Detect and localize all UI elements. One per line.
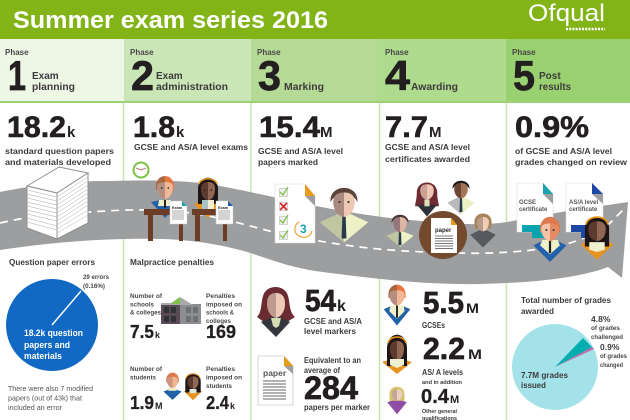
phase 3 [257,48,324,99]
headline stat: phase 3: papers marked [258,157,318,167]
panel: total grades awarded: changed [600,362,623,369]
headline stat: phase 4: GCSE and AS/A level [385,142,470,152]
icon: paper on brown circle: paper [435,228,452,234]
headline stat: phase 5 [515,111,627,167]
certificate: GCSE [517,183,553,238]
panel: malpractice penalties [130,257,242,413]
phase 3: Marking [284,82,324,93]
pie chart: question papers [6,279,98,371]
stat: papers per marker: Equivalent to an [304,355,361,365]
phase 5: Post [539,71,561,82]
phase 1: Phase [5,48,29,57]
stat: other general qualifications: M [450,394,459,406]
panel: total grades awarded: 7.7M grades [521,370,568,380]
person: results girl [580,217,614,260]
stat: AS and A levels: 2.2 [423,331,465,366]
stat: penalties on schools: 169 [206,322,236,342]
Ofqual logo: Ofqual [528,0,605,27]
stat: schools and colleges: schools [130,302,154,308]
panel: total grades awarded [512,295,627,410]
phase 4 [385,48,458,99]
panel: question paper errors: 29 errors [83,274,109,281]
headline stat: phase 1: k [67,124,76,141]
person: other qualifications girl [387,387,407,414]
stat: GCSEs: GCSEs [422,320,445,330]
phase 1: Exam [32,71,59,82]
headline stat: phase 4: M [429,124,442,141]
header band [0,0,630,39]
headline stat: phase 2: 1.8 [133,111,175,144]
stat: schools and colleges [130,293,163,342]
person: man left [386,215,414,247]
stat: students: 1.9 [130,393,154,413]
phase 5: Phase [512,48,536,57]
icon: school building [161,297,201,324]
person: exam candidate girl [194,178,222,218]
icon: clock [134,162,148,178]
exam desks with papers: Exam [172,206,183,210]
stat: markers: GCSE and AS/A [304,316,362,326]
panel: question paper errors [6,257,109,412]
certificate: GCSE: certificate [519,207,548,213]
stat: penalties on schools: colleges [206,318,231,325]
person: large woman [257,287,295,337]
stat: penalties on schools: Penalties [206,293,235,300]
phase 1: planning [32,82,75,93]
headline stat: phase 5: 0.9% [515,111,589,144]
headline stat: phase 1: 18.2 [7,111,66,144]
person: small girl [184,373,202,400]
panel: markers [257,283,371,412]
stat: papers per marker: average of [304,365,340,375]
panel: question paper errors: (0.16%) [83,283,105,290]
headline stat: phase 3: 15.4 [259,111,320,144]
panel: question paper errors: included an error [8,403,63,412]
person: results boy [534,217,566,262]
stat: schools and colleges: Number of [130,293,163,300]
stat: students: students [130,374,156,382]
certificate: AS/A level: certificate [569,207,598,213]
phase 2: 2 [131,52,154,99]
headline stat: phase 1: standard question papers [5,146,114,156]
phase 4: Phase [385,48,409,57]
panel: total grades awarded: Total number of grades [521,295,611,305]
stat: markers: level markers [304,326,356,336]
stat: penalties on schools: schools & [206,310,234,316]
panel: total grades awarded: challenged [591,334,623,341]
panel: total grades awarded: 0.9% [600,342,620,352]
headline stat: phase 5: of GCSE and AS/A level [515,146,612,156]
exam desks with papers: Exam [218,206,229,210]
phase 5: 5 [513,52,535,99]
phase 1: 1 [8,52,26,99]
phase 3: Phase [257,48,281,57]
phase 3: 3 [258,52,281,99]
title: Summer exam series 2016 [13,7,328,34]
panel: total grades awarded: 4.8% [591,314,611,324]
marked paper with ticks [275,184,315,243]
stat: penalties on schools [206,293,242,342]
panel: total grades awarded: of grades [600,353,627,360]
stat: penalties on students: Penalties [206,366,235,373]
panel: total grades awarded: of grades [591,325,620,332]
phase 1 [5,48,75,99]
person: small boy [163,373,182,400]
marked paper with ticks: 3 [300,222,307,236]
phase 2 [130,48,228,99]
stat: penalties on students: imposed on [206,374,242,382]
headline stat: phase 1 [5,111,114,167]
panel: certificates by qualification [382,285,482,420]
stat: schools and colleges: k [155,330,161,340]
stat: other general qualifications: 0.4 [421,386,450,408]
panel: malpractice penalties: Malpractice penalties [130,257,214,267]
stat: students [130,366,163,413]
stat: GCSEs: 5.5 [423,285,464,320]
road arrow [0,181,628,284]
person: A level girl [382,335,412,374]
panel: total grades awarded: issued [521,380,546,390]
stat: penalties on students [206,366,242,413]
headline stat: phase 1: and materials developed [5,157,111,167]
stat: students: M [155,401,162,411]
stat: schools and colleges: 7.5 [130,322,154,342]
stat: papers per marker [304,355,371,412]
phase 5: results [539,82,571,93]
headline stat: phase 3 [258,111,343,167]
stat: penalties on students: 2.4 [206,393,229,413]
panel: question paper errors: 18.2k question [24,328,83,338]
phase 2: Exam [156,71,183,82]
panel: question paper errors: papers (out of 43k) that [8,394,82,402]
headline stat: phase 4: certificates awarded [385,154,470,164]
headline stat: phase 3: M [320,124,332,141]
stat: GCSEs: M [466,300,479,316]
headline stat: phase 2: GCSE and AS/A level exams [134,142,248,152]
stat: penalties on students: students [206,383,232,390]
phase 4: 4 [385,52,411,99]
icon: paper sheet: paper [263,368,287,378]
person: exam candidate boy [151,176,179,218]
phase 2: Phase [130,48,154,57]
stat: penalties on students: k [230,401,236,411]
person: dark-skinned man [447,181,475,214]
certificate: AS/A level [566,183,603,238]
headline stat: phase 2: k [176,124,185,141]
phase 4: Awarding [411,82,458,93]
panel: question paper errors: materials [24,351,62,361]
certificate: GCSE: GCSE [519,200,536,206]
certificate: AS/A level: AS/A level [569,200,598,206]
person: woman with red hair [415,182,439,216]
pie chart: grades [512,324,598,410]
stat: papers per marker: papers per marker [304,402,371,412]
phase tabs row [0,39,630,103]
stat: students: Number of [130,366,163,373]
stat: GCSEs [422,285,479,330]
panel: question paper errors: There were also 7 modified [8,384,93,393]
stat: AS and A levels: AS/ A levels [422,367,463,377]
headline stat: phase 3: GCSE and AS/A level [258,146,343,156]
headline stat: phase 2 [133,111,248,152]
person: marker man [320,188,368,242]
stat: markers [304,283,362,336]
stat: other general qualifications [421,386,459,420]
stat: papers per marker: 284 [304,370,358,406]
stat: AS and A levels: and in addition [422,380,463,386]
stat: markers: 54 [305,283,337,318]
stat: AS and A levels: M [468,346,482,362]
person: GCSE boy [384,285,410,325]
awarding group of people and paper [386,181,496,259]
panel: question paper errors: papers and [24,340,70,350]
phase 2: administration [156,82,228,93]
panel: question paper errors: Question paper errors [9,257,95,267]
icon: paper stack [27,167,88,239]
stat: schools and colleges: & colleges [130,310,161,316]
stat: penalties on schools: imposed on [206,302,242,308]
headline stat: phase 5: grades changed on review [515,157,627,167]
phase 5 [512,48,571,99]
stat: AS and A levels [422,331,482,386]
panel: total grades awarded: awarded [521,306,554,316]
stat: other general qualifications: Other general [422,409,457,415]
headline stat: phase 4 [385,111,470,164]
headline stat: phase 4: 7.7 [385,111,428,144]
exam desks with papers [144,201,233,241]
person: woman right [470,214,496,248]
stat: markers: k [337,298,346,315]
